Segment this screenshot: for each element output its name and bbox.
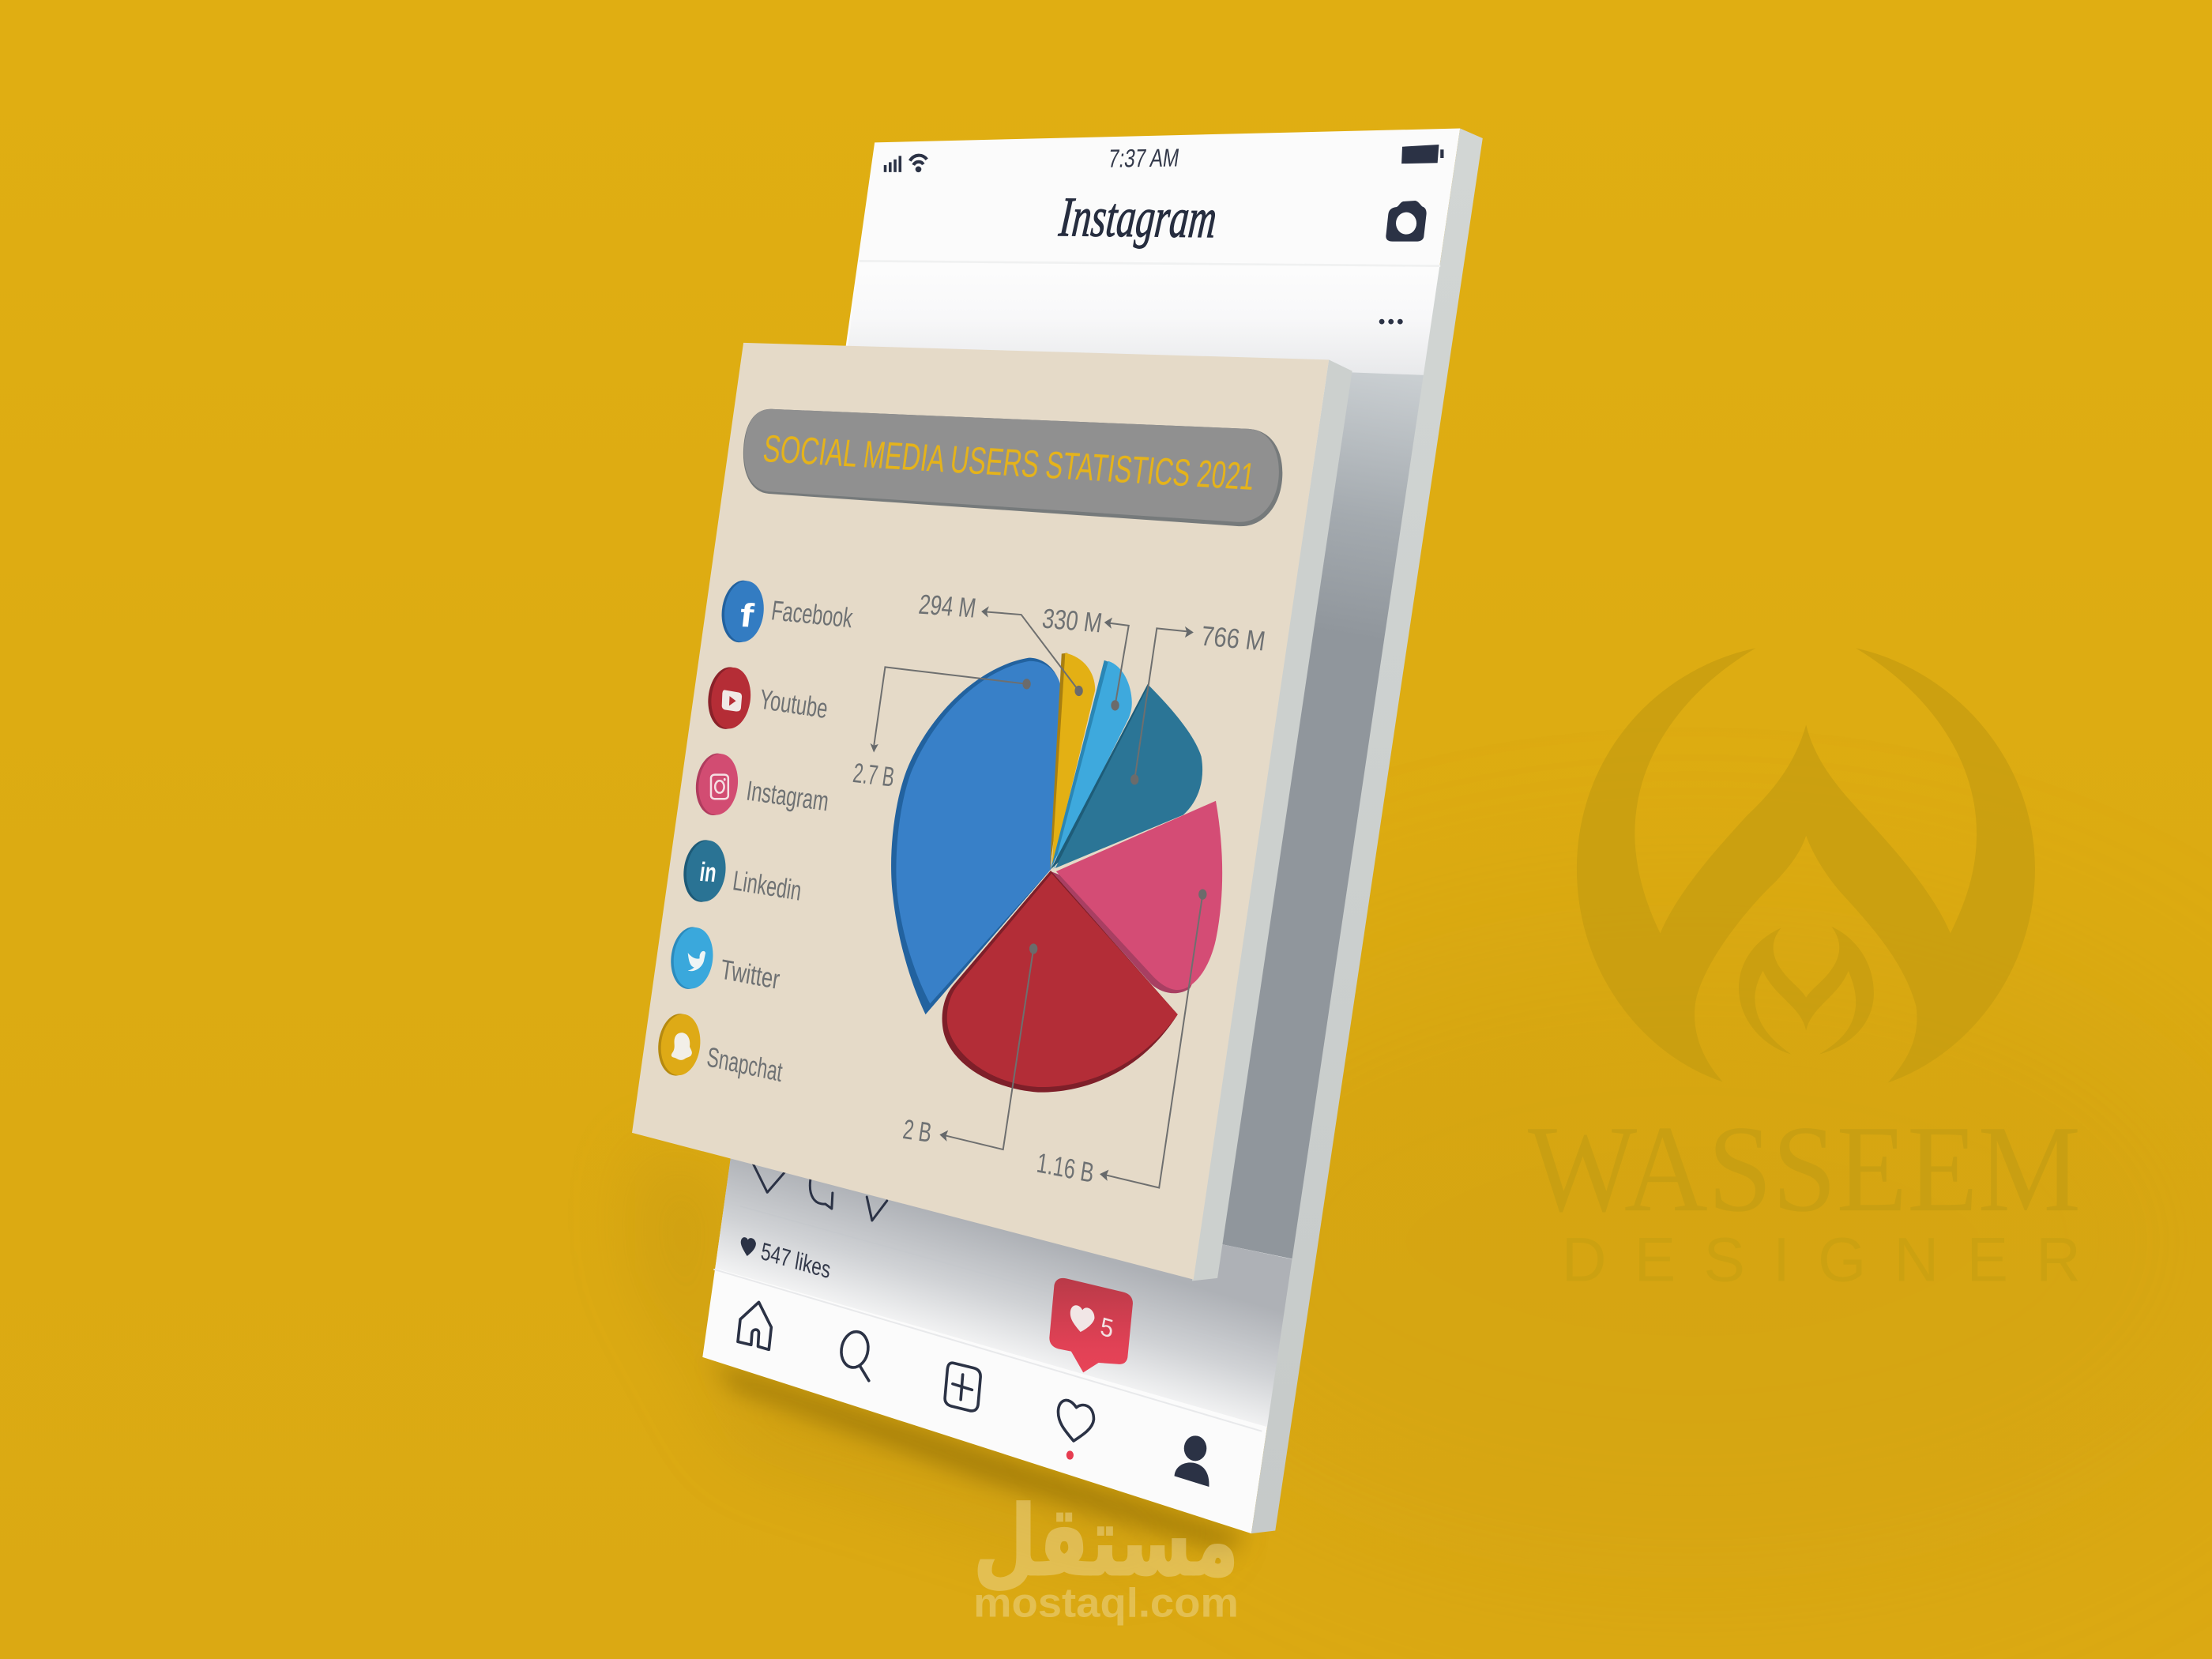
watermark: designer wordmark: DESIGNER [1562,1224,2081,1294]
callout: 1.16 B [1035,889,1206,1188]
legend: twitter: Twitter [719,954,781,995]
search icon [840,1331,870,1381]
legend: snapchat [656,1012,784,1088]
activity dot [1066,1450,1074,1460]
callout: 1.16 B: 1.16 B [1035,1147,1096,1188]
tab bar divider [713,1270,1262,1431]
share icon [867,1197,887,1221]
profile icon [1174,1435,1209,1487]
battery icon [1401,145,1444,164]
callout: 330 M [1040,603,1129,710]
phone screen [702,128,1460,1533]
bubble heart [1070,1305,1094,1332]
slice: facebook 2.7 B [891,658,1062,1014]
card shadow strip on screen [1221,372,1428,1260]
callout: 330 M: 330 M [1040,603,1104,638]
card side edge [1192,359,1352,1281]
legend and pie group [656,579,1267,1188]
legend: youtube: Youtube [758,683,830,724]
like icon [752,1161,785,1192]
mostaql latin: mostaql.com [973,1579,1239,1625]
mostaql arabic: مستقل [973,1485,1239,1597]
title text: SOCIAL MEDIA USERS STATISTICS 2021 [761,427,1258,498]
shadow below phone [713,1361,1248,1552]
comment icon [810,1179,833,1209]
legend: instagram: Instagram [745,775,830,817]
camera icon [1386,201,1427,242]
likes count: 547 likes [759,1237,833,1284]
slice: instagram 1.16 B [1051,801,1222,993]
notification bubble [1049,1278,1133,1372]
callout: 294 M: 294 M [917,589,978,623]
legend: linkedin [681,838,803,906]
soft background shading [1100,903,2212,1580]
signal icon [884,156,901,172]
legend: twitter [668,926,781,995]
bubble count: 5 [1099,1311,1115,1344]
activity heart icon [1058,1400,1093,1441]
phone mockup [702,128,1483,1533]
lower screen fade [715,1157,1295,1428]
home icon [738,1302,771,1349]
slice: snapchat 294 M [1050,653,1095,869]
title pill [743,409,1282,526]
callout: 294 M [917,589,1083,696]
header fade [844,262,1440,378]
legend: facebook: Facebook [769,594,855,634]
callouts [851,589,1267,1188]
post divider [740,1206,1254,1349]
callout: 766 M [1130,620,1267,784]
legend: linkedin: Linkedin [731,864,803,906]
pill face [744,409,1279,522]
add icon [945,1363,980,1411]
callout: 2.7 B [851,667,1031,792]
mostaql watermark [973,1485,1239,1625]
callout: 2 B [901,943,1037,1149]
legend: youtube [705,666,830,731]
legend: facebook [719,579,855,644]
watermark: wasseem wordmark: WASSEEM [1528,1100,2081,1237]
legend: instagram [693,752,830,817]
legend: linkedin: in [698,856,718,888]
card face [632,343,1329,1280]
instagram logo: Instagram [1056,186,1220,250]
wifi icon [910,156,927,171]
pill shadow [743,409,1282,526]
legend: snapchat: Snapchat [705,1041,784,1088]
legend: facebook: f [738,597,755,634]
callout: 2.7 B: 2.7 B [851,757,897,792]
infographic card [632,343,1352,1281]
phone side edge [1251,128,1483,1533]
callout: 766 M: 766 M [1199,620,1267,656]
likes heart [741,1237,756,1256]
slice: twitter 330 M [1051,660,1132,869]
callout: 2 B: 2 B [901,1113,934,1148]
pie chart [891,653,1222,1093]
status time: 7:37 AM [1107,144,1181,173]
wide phone shadow [635,1142,1241,1566]
legend [656,579,855,1088]
more dots [1379,319,1403,325]
slice: linkedin 766 M [1051,684,1202,869]
lower dividers and nav icons [713,1161,1262,1487]
header divider [860,261,1440,266]
slice: youtube 2 B [942,871,1178,1093]
watermark: wasseem logo [1577,648,2035,1082]
